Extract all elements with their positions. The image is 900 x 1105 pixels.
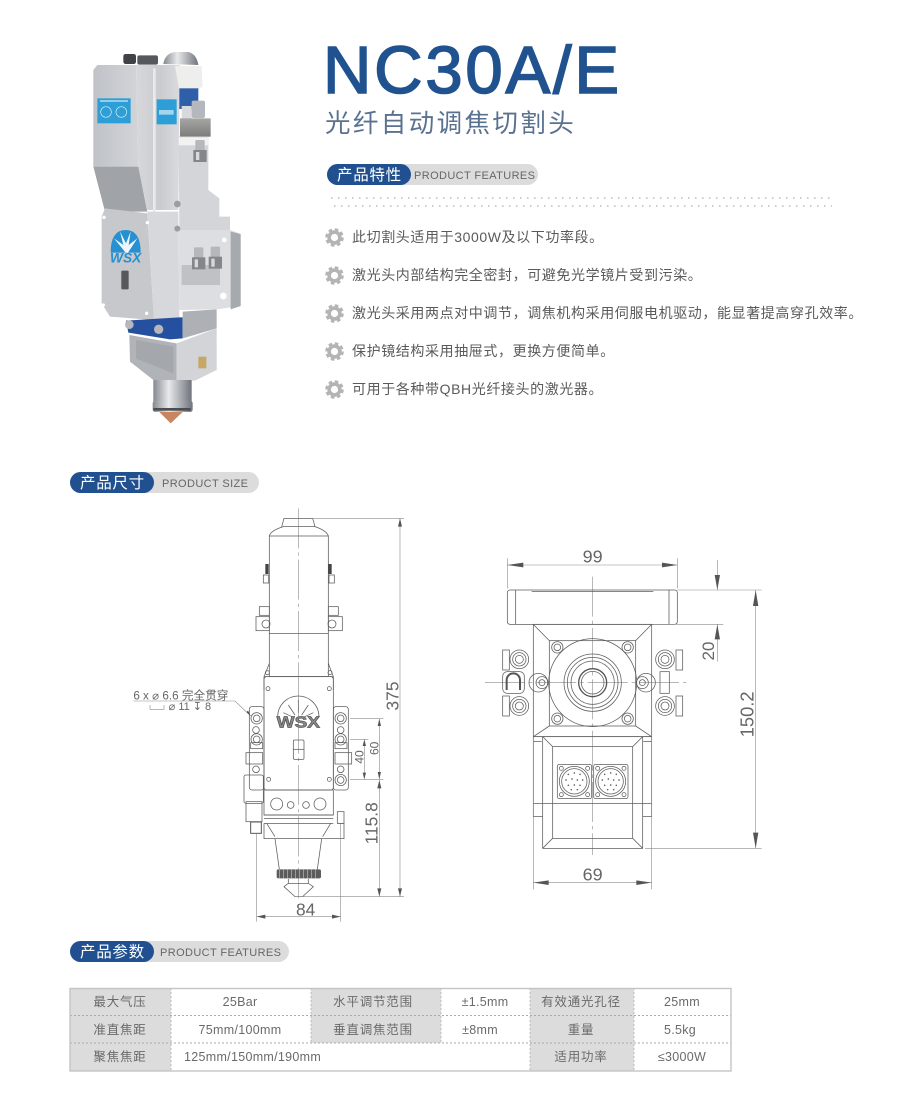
feature 2: 激光头内部结构完全密封，可避免光学镜片受到污染。 (352, 267, 702, 283)
callout: hole specification: 6 x ⌀ 6.6 完全贯穿 (133, 688, 228, 702)
top view outline (485, 577, 690, 855)
parameters table (70, 988, 731, 1071)
heading: product size: 产品尺寸 (80, 474, 145, 492)
upper housing (93, 65, 203, 317)
table row 3: 聚焦焦距 (93, 1050, 147, 1064)
dimension 20: 20 (699, 642, 718, 660)
feature 4: 保护镜结构采用抽屉式，更换方便简单。 (352, 343, 615, 359)
table row 1: 水平调节范围 (333, 995, 413, 1009)
table row 2: 5.5kg (664, 1023, 696, 1037)
table row 2 (93, 1022, 696, 1037)
right side assembly (174, 88, 241, 310)
dimension 60: 60 (367, 741, 381, 755)
nozzle block (129, 328, 217, 423)
dimension 150.2: 150.2 (736, 691, 757, 737)
dimension 99 (507, 546, 677, 588)
lower housing (102, 208, 179, 320)
dimension 69: 69 (583, 865, 603, 885)
dimension 115.8 (362, 780, 382, 897)
top connectors (123, 52, 198, 65)
table row 3: 适用功率 (554, 1049, 608, 1064)
feature 1: 此切割头适用于3000W及以下功率段。 (352, 229, 604, 245)
table row 1: 有效通光孔径 (541, 994, 621, 1009)
table row 2: 75mm/100mm (199, 1023, 281, 1037)
table row 3 (93, 1049, 706, 1064)
dimension 84: 84 (296, 900, 316, 920)
heading: product size: PRODUCT SIZE (162, 478, 248, 490)
table row 1: 25mm (664, 995, 700, 1009)
WSX logo on drawing: WSX (277, 714, 321, 731)
heading: product features: 产品特性 (337, 166, 402, 184)
table row 2: 重量 (568, 1022, 594, 1037)
subtitle: 光纤自动调焦切割头 (325, 110, 576, 138)
title: NC30A/E (323, 33, 622, 108)
heading: product parameters: 产品参数 (80, 943, 145, 961)
table row 2: 准直焦距 (93, 1023, 147, 1037)
dimension 150.2 (645, 590, 762, 848)
table row 2: ±8mm (462, 1023, 498, 1037)
table row 1 (93, 994, 700, 1009)
heading: product features (327, 164, 538, 185)
dimension 84 (257, 823, 341, 922)
feature 5: 可用于各种带QBH光纤接头的激光器。 (352, 381, 603, 397)
dotted divider (331, 198, 832, 206)
product photo: laser cutting head (93, 52, 241, 423)
dimension 375: 375 (382, 682, 402, 710)
table row 2: 垂直调焦范围 (333, 1023, 413, 1037)
drawing: top view (485, 546, 762, 889)
dimension 69 (533, 737, 652, 889)
table row 1: 25Bar (223, 995, 257, 1009)
dimension 20 (653, 560, 762, 662)
labels and logo: WSX (110, 249, 143, 265)
dimension 40: 40 (352, 750, 366, 764)
callout: hole specification: ⌀ 11 ↧ 8 (169, 701, 211, 713)
blue adapter ring (125, 309, 217, 339)
table row 3: ≤3000W (658, 1050, 706, 1064)
dimension 115.8: 115.8 (362, 802, 382, 844)
heading: product parameters (70, 941, 289, 962)
feature list (327, 229, 863, 397)
heading: product features: PRODUCT FEATURES (414, 170, 535, 182)
table row 1: 最大气压 (93, 994, 147, 1009)
table row 3: 125mm/150mm/190mm (184, 1050, 321, 1064)
heading: product size (70, 472, 259, 493)
WSX logo on drawing (277, 696, 321, 731)
labels and logo (97, 98, 177, 289)
table row 1: ±1.5mm (462, 995, 508, 1009)
dimension 60 (350, 719, 383, 779)
callout: hole specification (133, 688, 251, 716)
side view outline (244, 508, 352, 898)
heading: product parameters: PRODUCT FEATURES (160, 947, 281, 959)
drawing: side view (133, 508, 404, 922)
feature 3: 激光头采用两点对中调节，调焦机构采用伺服电机驱动，能显著提高穿孔效率。 (352, 305, 863, 321)
dimension 99: 99 (583, 546, 603, 566)
dimension 40 (350, 739, 368, 779)
dimension 375 (295, 518, 404, 897)
